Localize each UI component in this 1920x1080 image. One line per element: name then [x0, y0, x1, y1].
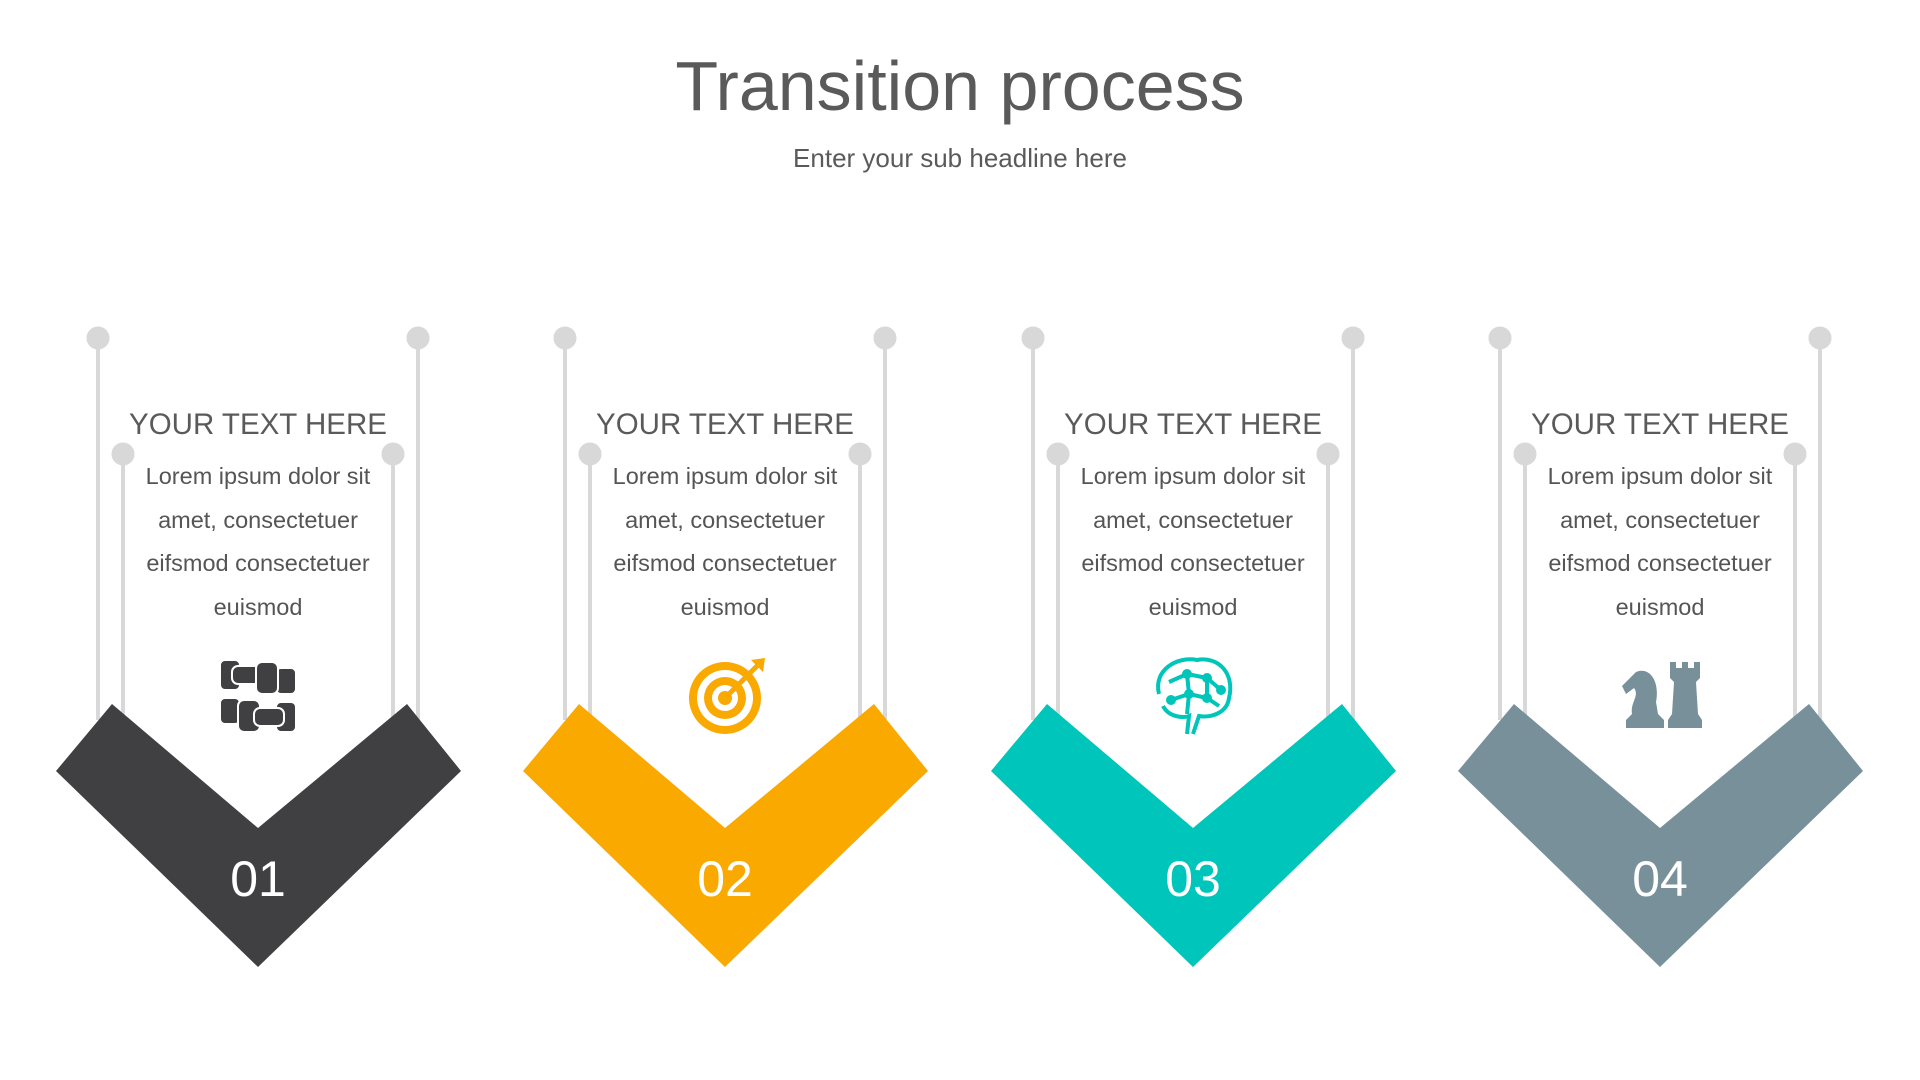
- panel 1 text: [129, 408, 387, 907]
- panel 2 text: Lorem ipsum dolor sit: [613, 463, 837, 489]
- panel 4 text: euismod: [1616, 594, 1704, 620]
- icon: target: [689, 658, 765, 734]
- panel 3 graphic: [991, 327, 1396, 967]
- panel 3 text: Lorem ipsum dolor sit: [1081, 463, 1305, 489]
- panel 1 text: Lorem ipsum dolor sit: [146, 463, 370, 489]
- panel 4 text: eifsmod consectetuer: [1548, 550, 1772, 576]
- panel 3 text: amet, consectetuer: [1093, 506, 1293, 532]
- number 02: 02: [697, 851, 753, 907]
- panel 4 text: [1531, 408, 1789, 907]
- icon: brain: [1158, 659, 1230, 734]
- panel 3 text: eifsmod consectetuer: [1081, 550, 1305, 576]
- panel 2 text: YOUR TEXT HERE: [596, 408, 854, 441]
- panel 2 text: [596, 408, 854, 907]
- panel 4 graphic: [1458, 327, 1863, 967]
- number 04: 04: [1632, 851, 1688, 907]
- number 03: 03: [1165, 851, 1221, 907]
- title: Transition process: [675, 47, 1245, 125]
- panel 1 text: eifsmod consectetuer: [146, 550, 370, 576]
- panel 2 text: amet, consectetuer: [625, 506, 825, 532]
- icon: hands: [220, 660, 296, 732]
- panel 1 text: euismod: [214, 594, 302, 620]
- panel 3 text: [1064, 408, 1322, 907]
- panel 3 text: euismod: [1149, 594, 1237, 620]
- panel 2 text: euismod: [681, 594, 769, 620]
- panel 1 graphic: [56, 327, 461, 967]
- panel 1 text: YOUR TEXT HERE: [129, 408, 387, 441]
- panel 1 text: amet, consectetuer: [158, 506, 358, 532]
- panel 2 text: eifsmod consectetuer: [613, 550, 837, 576]
- panel 4 text: Lorem ipsum dolor sit: [1548, 463, 1772, 489]
- subtitle: Enter your sub headline here: [793, 143, 1127, 173]
- panel 4 text: amet, consectetuer: [1560, 506, 1760, 532]
- panel 3 text: YOUR TEXT HERE: [1064, 408, 1322, 441]
- panel 4 text: YOUR TEXT HERE: [1531, 408, 1789, 441]
- panel 2 graphic: [523, 327, 928, 967]
- number 01: 01: [230, 851, 286, 907]
- icon: chess: [1622, 662, 1702, 728]
